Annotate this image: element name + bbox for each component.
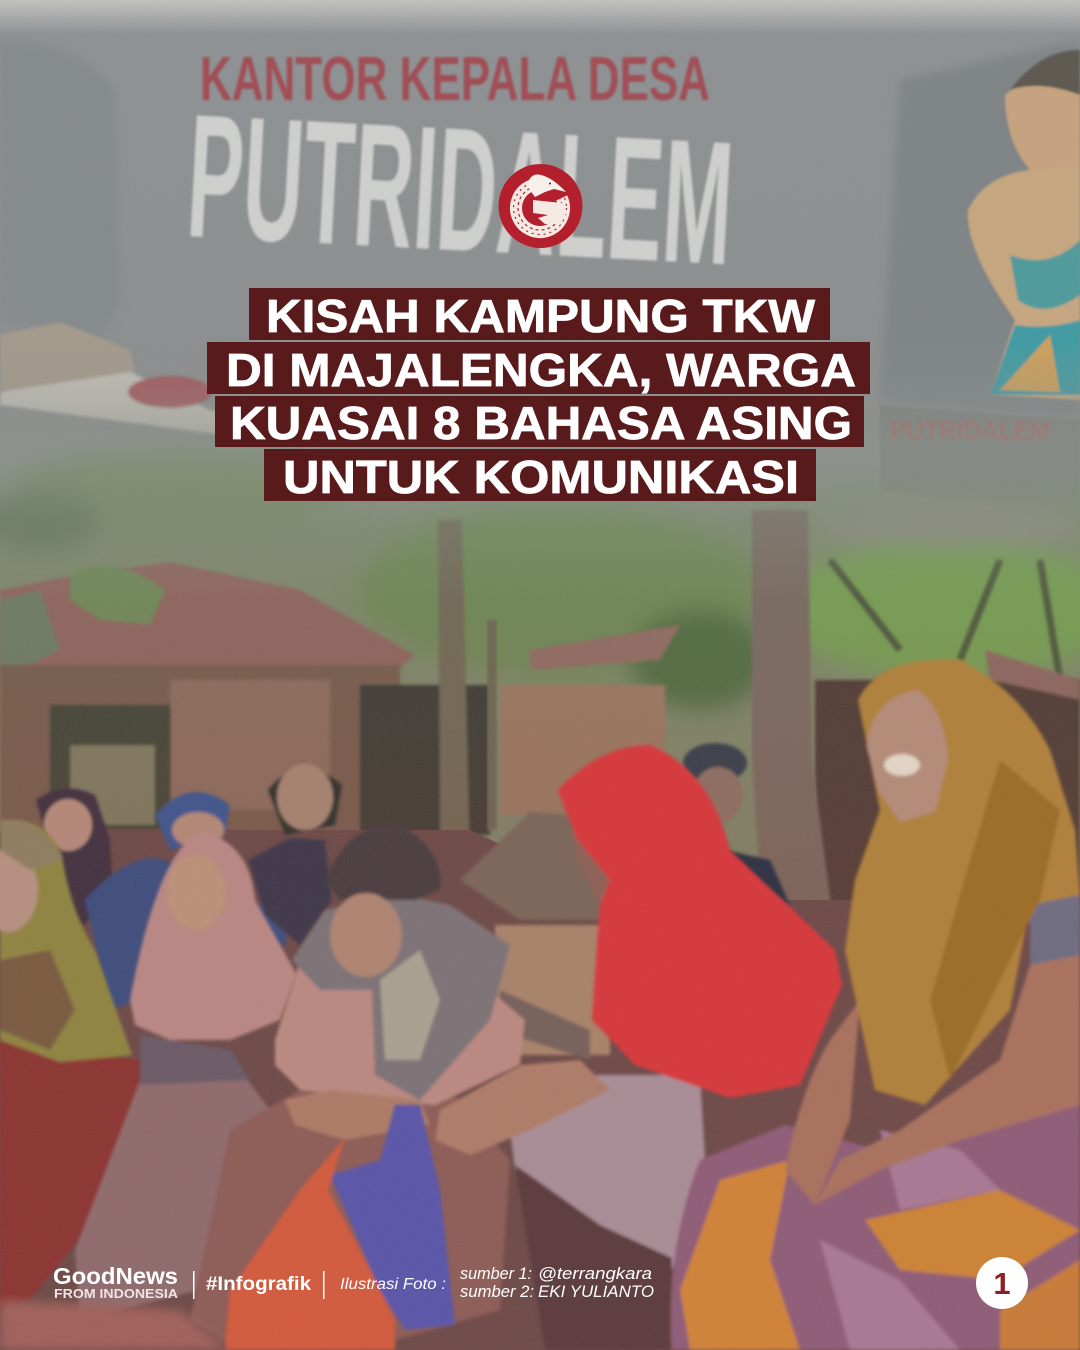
background: village office wall	[0, 0, 1080, 560]
shopping bags	[225, 1105, 455, 1350]
tree branches	[830, 560, 1060, 680]
wall sign: office name: KANTOR KEPALA DESA	[200, 45, 710, 114]
background figure: man with cap	[683, 743, 790, 905]
footer credits	[53, 1263, 654, 1301]
brand: GoodNews from Indonesia	[53, 1263, 178, 1301]
tree trunks	[438, 520, 470, 850]
title line 4: UNTUK KOMUNIKASI	[283, 451, 799, 503]
ground foreground	[0, 1300, 230, 1350]
blue bag	[330, 1105, 455, 1330]
figure: laughing woman in mustard hijab	[671, 660, 1080, 1350]
title	[207, 288, 870, 503]
photo sources: sumber 2:	[460, 1282, 534, 1301]
photo sources: @terrangkara	[538, 1264, 652, 1283]
photo sources: sumber 1:	[460, 1264, 532, 1283]
house roof	[0, 562, 415, 680]
arms and hands	[785, 1000, 860, 1205]
title line 3: KUASAI 8 BAHASA ASING	[230, 397, 852, 449]
decorative rocks and flowers	[0, 322, 320, 445]
ground and crowd shadow	[0, 830, 1080, 1350]
photo sources	[460, 1264, 654, 1301]
wall mural: dancer: PUTRIDALEM	[890, 415, 1050, 446]
wall mural: dancer	[880, 50, 1080, 520]
wall sign: office name	[183, 45, 738, 302]
hashtag: #Infografik	[206, 1274, 311, 1295]
haze blending wall and garden	[0, 340, 1080, 600]
title line 2: DI MAJALENGKA, WARGA	[226, 344, 856, 396]
title line 1: KISAH KAMPUNG TKW	[266, 290, 816, 342]
background reddish tint	[0, 500, 1080, 900]
figure: woman in red hijab	[435, 745, 842, 1350]
photo sources: EKI YULIANTO	[538, 1282, 654, 1301]
photo credit label: Ilustrasi Foto :	[340, 1276, 446, 1293]
figure: woman in pink hijab	[75, 832, 297, 1320]
background: trees and house	[0, 450, 1080, 935]
figure: women seated at back left	[36, 764, 342, 1010]
orange bag	[225, 1138, 395, 1350]
figure: woman in olive headscarf, far left	[0, 819, 150, 1310]
logo: Garuda G emblem	[498, 164, 582, 248]
brand: GoodNews from Indonesia: GoodNews	[53, 1263, 178, 1289]
figure: center woman in patterned hijab	[190, 825, 525, 1345]
background figure: bamboo bench	[460, 812, 610, 1060]
house wall	[0, 665, 400, 855]
brand: GoodNews from Indonesia: FROM INDONESIA	[54, 1287, 178, 1301]
page number badge: 1	[993, 1266, 1011, 1301]
page number badge	[976, 1257, 1028, 1309]
